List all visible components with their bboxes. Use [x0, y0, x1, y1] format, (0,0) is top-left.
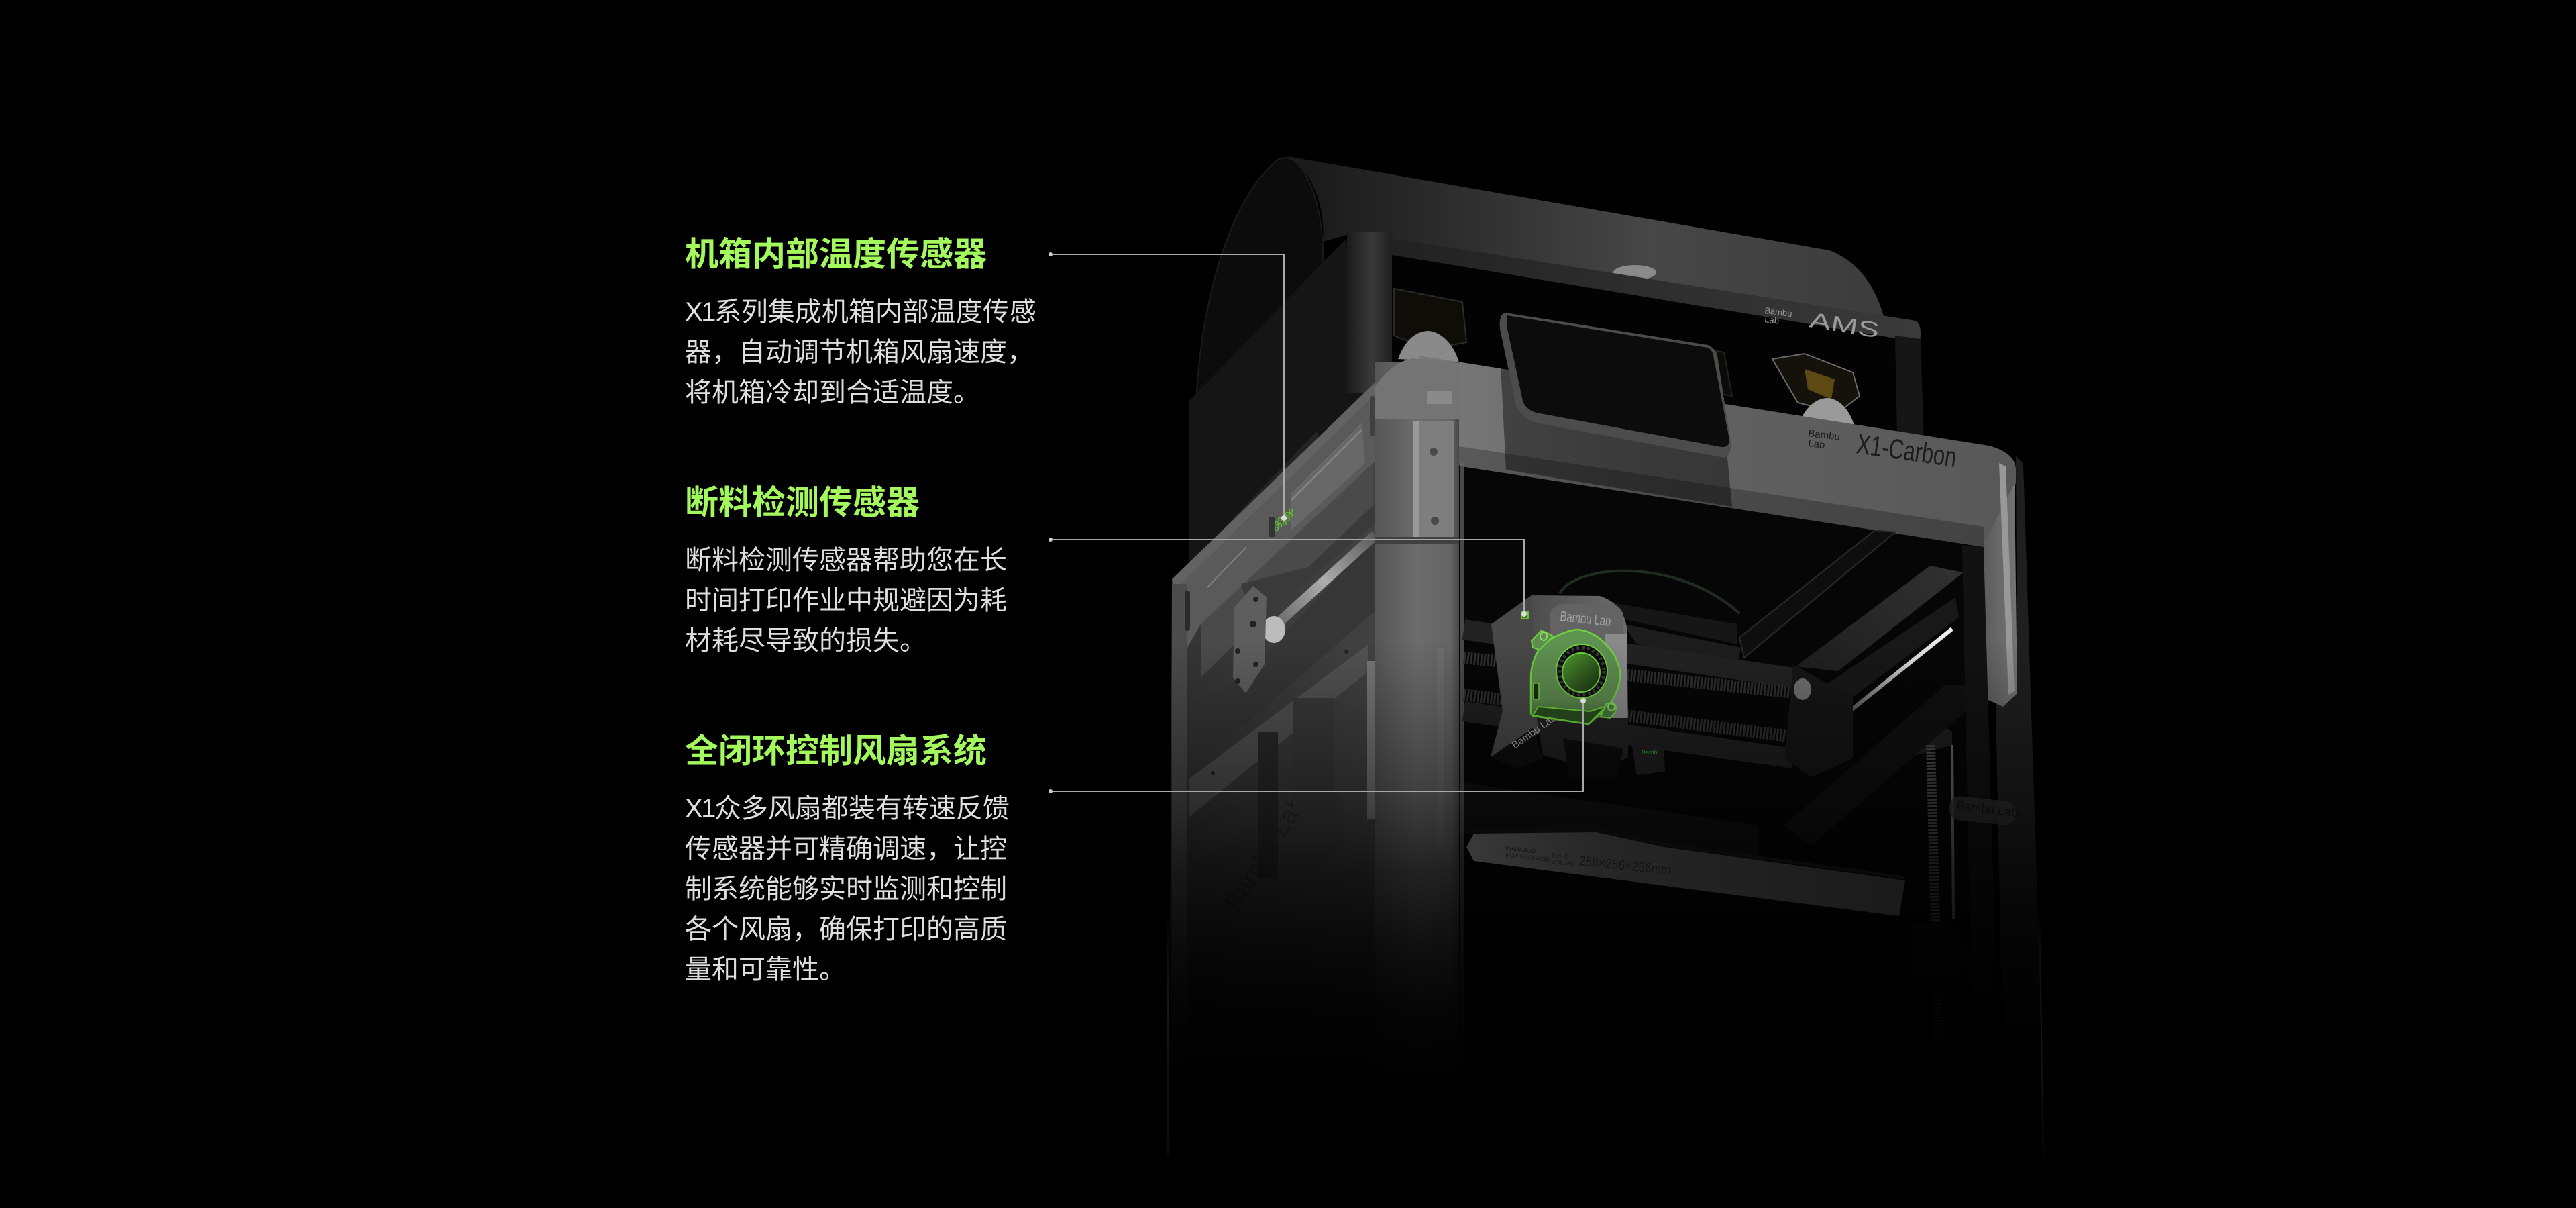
- AMS logo text: Lab: [1764, 314, 1780, 326]
- logo on lower bracket: Bambu Lab: [1219, 791, 1312, 916]
- left rod and cap: [1275, 535, 1375, 626]
- body text: [685, 297, 1036, 407]
- text block: closed-loop fan control: [685, 732, 1010, 985]
- right badge: Bambu Lab: [1956, 799, 2019, 819]
- body text: X1系列集成机箱内部温度传感: [685, 297, 1036, 327]
- text block: filament run-out sensor: [685, 484, 1007, 656]
- light sub-plate: [1291, 423, 1365, 530]
- motor plate: [1233, 586, 1267, 693]
- heading: 全闭环控制风扇系统: [685, 732, 987, 770]
- leader line: fan: [1049, 698, 1586, 793]
- lower block: [1536, 715, 1628, 772]
- side module: [1630, 735, 1665, 775]
- diagonal strut: [1189, 644, 1368, 817]
- AMS side panel lighter inner part: [1234, 430, 1318, 570]
- AMS corner pillar: [1347, 232, 1392, 393]
- AMS unit: [1189, 156, 1924, 604]
- screen: [1500, 313, 1731, 458]
- body text: 制系统能够实时监测和控制: [685, 874, 1007, 904]
- shadow under screen on beam: [1501, 366, 1732, 507]
- leader line: filament sensor: [1049, 538, 1527, 617]
- AMS spool cones: [1398, 331, 1857, 436]
- front top beam: [1419, 356, 2016, 547]
- printer dark interior: [1456, 463, 1986, 1208]
- faint outer edges: [1168, 906, 2044, 1154]
- body text: 时间打印作业中规避因为耗: [685, 586, 1007, 615]
- right bracket and lead screw: [1887, 711, 1969, 1047]
- beam lower darker stripe: [1459, 446, 1984, 547]
- top rim: [1172, 374, 1384, 591]
- build plate: 256×256×256mm: [1578, 854, 1672, 878]
- body text: X1众多风扇都装有转速反馈: [685, 794, 1010, 823]
- printer logo text: X1-Carbon: [1855, 427, 1959, 473]
- AMS logo text: Bambu: [1764, 305, 1792, 319]
- right pillar: [1962, 456, 2047, 1208]
- body text: 量和可靠性。: [685, 955, 846, 985]
- chamber temperature sensor, green: [1275, 509, 1292, 530]
- window bar: [1367, 661, 1379, 819]
- AMS logo text: AMS: [1808, 307, 1881, 342]
- build plate: HOT SURFACE!: [1505, 852, 1550, 863]
- build plate: VOLUME: [1551, 858, 1577, 868]
- right diagonal brace: [1784, 685, 1966, 846]
- toolhead: Bambu Lab: [1510, 712, 1558, 751]
- body text: 器，自动调节机箱风扇速度，: [685, 338, 1034, 367]
- body: [1532, 595, 1628, 718]
- right badge: [1947, 795, 2019, 826]
- printer logo text: Bambu: [1808, 427, 1841, 443]
- build plate: WARNING!: [1505, 845, 1536, 855]
- build plate: [1466, 829, 1905, 916]
- left face slots: [1370, 396, 1375, 436]
- left side face: [1169, 374, 1384, 1208]
- lower dark region: [1191, 537, 1375, 772]
- body text: [685, 794, 1010, 985]
- AMS filament cartridges: [1394, 289, 1860, 413]
- pillar cap: [1375, 358, 1459, 419]
- printer logo text: [1808, 427, 1959, 473]
- AMS logo text: [1764, 305, 1881, 342]
- front left pillar: [1375, 362, 1459, 1208]
- AMS dome lid band: [1287, 156, 1886, 332]
- toolhead: [1491, 595, 1665, 778]
- left vertical rim: [1172, 584, 1187, 1208]
- heading: 断料检测传感器: [685, 484, 920, 521]
- left face details: [1172, 374, 1384, 1208]
- AMS top trim: [1347, 232, 1921, 342]
- nozzle block with label: [1491, 728, 1543, 768]
- AMS front dark window: [1392, 248, 1924, 456]
- gantry rods and belts: [1464, 630, 1853, 777]
- bottom fade to black: [1107, 537, 2113, 1208]
- body text: 断料检测传感器帮助您在长: [685, 546, 1007, 575]
- upper plate: [1174, 386, 1384, 671]
- body text: [685, 546, 1007, 656]
- dark band: [1241, 503, 1375, 624]
- body text: 将机箱冷却到合适温度。: [685, 378, 980, 407]
- body text: 传感器并可精确调速，让控: [685, 834, 1007, 864]
- toolhead: Bambu: [1642, 749, 1661, 756]
- printer: [1169, 313, 2047, 1208]
- highlighted fan: [1531, 630, 1620, 724]
- AMS right edge: [1895, 336, 1924, 443]
- pillar light box: [1413, 421, 1454, 537]
- printer logo text: Lab: [1808, 438, 1825, 451]
- middle band: [1201, 463, 1373, 678]
- body text: 各个风扇，确保打印的高质: [685, 915, 1007, 944]
- AMS dome round end: [1196, 158, 1324, 403]
- build plate: BUILD: [1551, 852, 1570, 860]
- AMS side panel: [1189, 240, 1382, 604]
- text block: chamber temperature sensor: [685, 236, 1036, 407]
- head label: Bambu Lab: [1559, 609, 1611, 630]
- body text: 材耗尽导致的损失。: [685, 626, 926, 656]
- hub: [1613, 265, 1656, 280]
- left wing: [1491, 595, 1543, 757]
- internal columns: [1258, 732, 1278, 879]
- interior panel and rails, top right: [1739, 530, 1964, 722]
- filament sensor, green: [1521, 612, 1528, 619]
- small plate lower: [1261, 789, 1343, 886]
- leader line: chamber temperature sensor: [1049, 252, 1287, 521]
- cable chain and arc: [1560, 571, 1741, 664]
- heading: 机箱内部温度传感器: [685, 236, 987, 273]
- interior rear shelf: [1459, 782, 1758, 872]
